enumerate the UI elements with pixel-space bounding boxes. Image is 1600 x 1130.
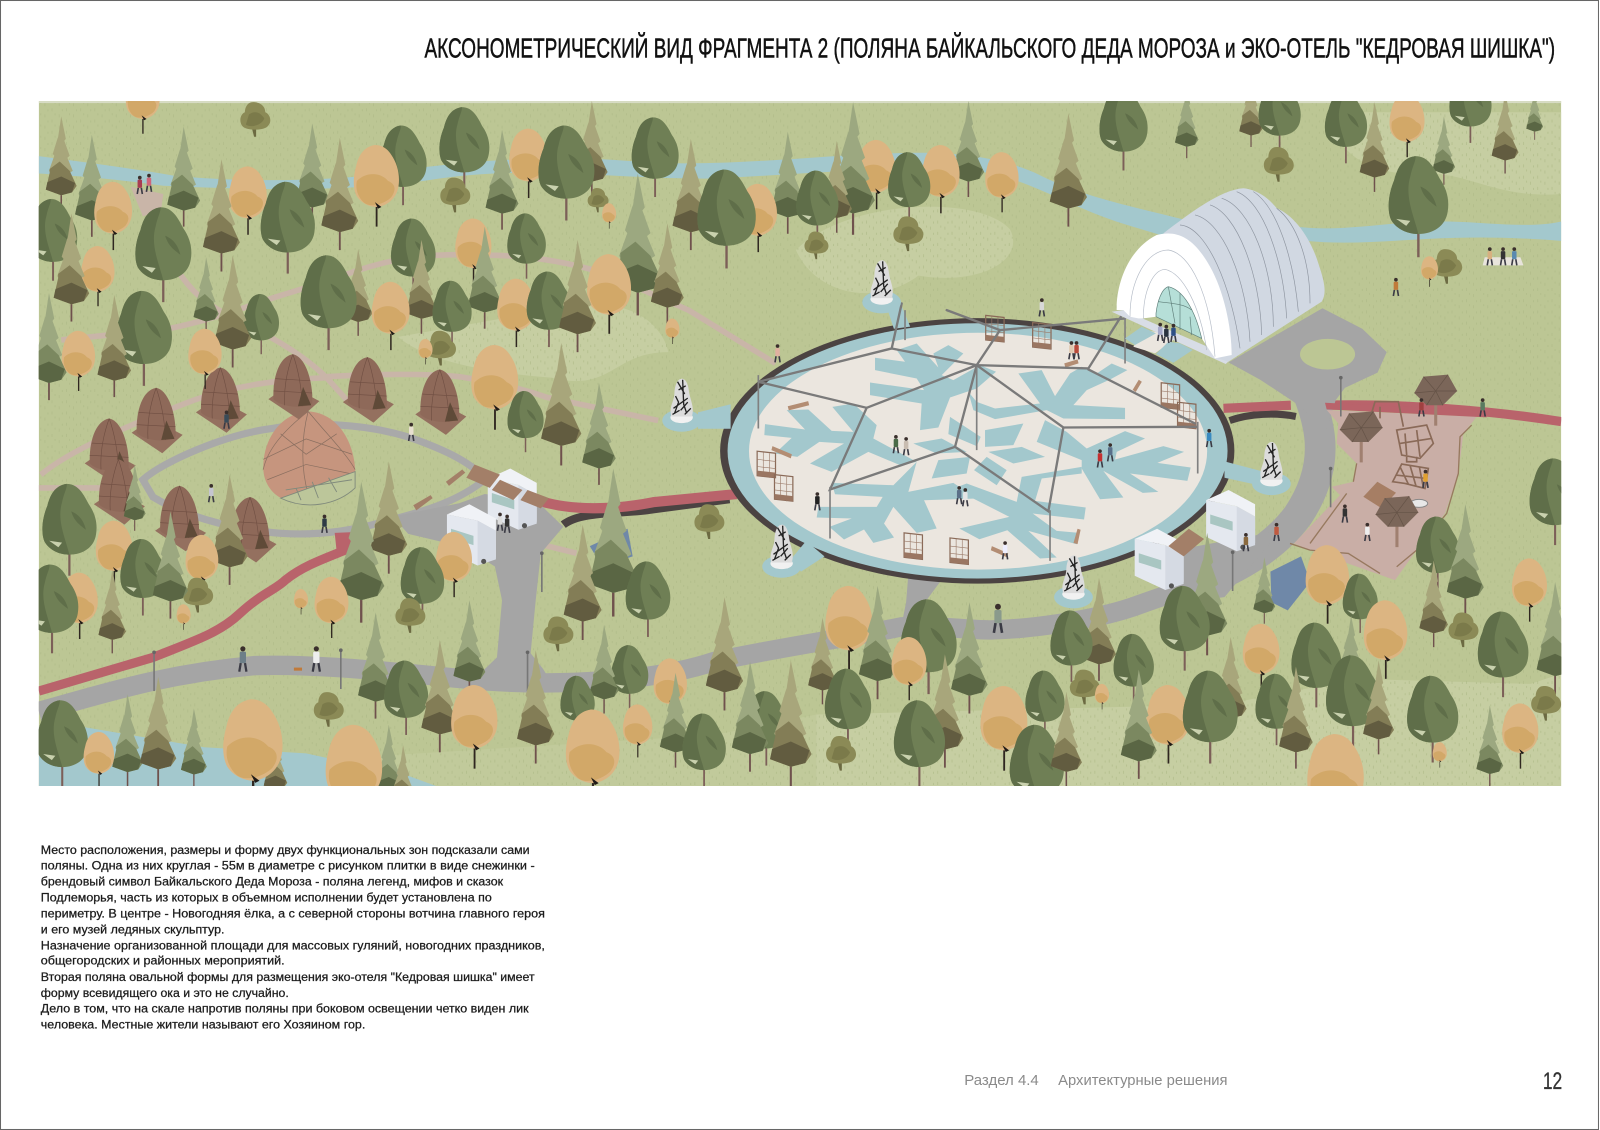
- ice museum: [1112, 188, 1325, 364]
- food trucks: [447, 469, 1255, 590]
- snowflake paving: [764, 343, 1191, 559]
- plaza: [698, 302, 1263, 592]
- description text: [41, 844, 545, 1031]
- description text: Подлеморья, часть из которых в объемном исполнении будет установлена по: [41, 891, 492, 904]
- axonometric illustration: [38, 101, 1562, 786]
- description text: поляны. Одна из них круглая - 55м в диаметре с рисунком плитки в виде снежинки -: [41, 860, 535, 873]
- playground: [1290, 402, 1487, 580]
- gathering point: [131, 187, 163, 216]
- picnic: [1483, 247, 1523, 265]
- dome pavilion: [263, 411, 355, 505]
- seating: [757, 315, 1196, 564]
- pool connectors: [698, 302, 1263, 592]
- glamping huts: [85, 354, 466, 562]
- river south: [39, 727, 439, 787]
- river north: [39, 153, 1561, 245]
- red cycle path west: [39, 545, 357, 691]
- visitors: [137, 174, 1485, 672]
- description text: человека. Местные жители называют его Хозяином гор.: [41, 1018, 365, 1031]
- playground umbrellas: [1340, 375, 1457, 547]
- description text: брендовый символ Байкальского Деда Мороза - поляна легенд, мифов и сказок: [41, 876, 504, 889]
- road network: [39, 308, 1387, 711]
- description text: форму всевидящего ока и это не случайно.: [41, 987, 289, 1000]
- beige footpaths: [38, 252, 777, 556]
- ground: [39, 101, 1561, 786]
- cable canopy: [758, 303, 1197, 511]
- oval path: [143, 424, 485, 534]
- benches and tables: [413, 464, 1204, 556]
- stone circles: [1410, 499, 1428, 507]
- page number: 12: [1543, 1068, 1562, 1095]
- description text: периметру. В центре - Новогодняя ёлка, а с северной стороны вотчина главного героя: [41, 908, 545, 921]
- description text: Место расположения, размеры и форму двух функциональных зон подсказали сами: [41, 844, 530, 857]
- lamp posts: [152, 376, 1343, 691]
- description text: общегородских и районных мероприятий.: [41, 955, 285, 968]
- climbing frames: [1370, 402, 1433, 488]
- museum entrance: [1156, 287, 1202, 338]
- description text: и его музей ледяных скульптур.: [41, 923, 224, 937]
- footer section label: [964, 1073, 1228, 1089]
- footer section label: Архитектурные решения: [1058, 1073, 1228, 1089]
- statues: [662, 260, 1291, 608]
- plaza benches: [771, 359, 1142, 557]
- description text: Вторая поляна овальной формы для размещения эко-отеля "Кедровая шишка" имеет: [41, 971, 535, 984]
- deck: [1363, 482, 1396, 508]
- description text: Назначение организованной площади для массовых гуляний, новогодних праздников,: [41, 939, 545, 952]
- description text: Дело в том, что на скале напротив поляны при боковом освещении четко виден лик: [41, 1003, 530, 1016]
- footer section label: Раздел 4.4: [964, 1073, 1039, 1089]
- canopy poles: [758, 310, 1198, 561]
- service sheds: [590, 529, 1310, 610]
- red and dark plaza links: [541, 405, 1561, 525]
- forest: [38, 101, 1562, 786]
- red wedge: [334, 532, 351, 549]
